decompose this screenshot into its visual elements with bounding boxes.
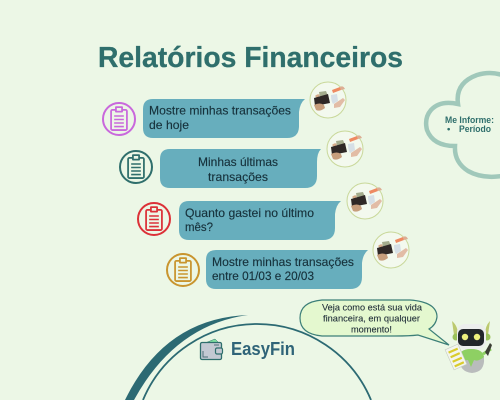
title: Relatórios Financeiros [98,42,403,74]
speech bubble 3: mês? [185,220,213,234]
icon: gold clipboard [167,254,199,286]
speech bubble 3 [179,201,341,240]
speech bubble 3: Quanto gastei no último [185,206,314,220]
icon: red clipboard [138,203,170,235]
robot speech bubble [300,300,449,345]
logo: EasyFin [200,339,295,360]
cloud callout: Período [459,124,491,135]
icon: wallet [200,339,222,360]
speech bubble 1 [143,99,305,138]
photo: wallet and hands [373,232,409,268]
speech bubble 2: Minhas últimas [198,155,278,169]
icon: teal clipboard [120,151,152,183]
robot speech bubble: momento! [351,324,392,336]
speech bubble 1: Mostre minhas transações [149,104,291,118]
decorative arcs [125,315,371,400]
cloud callout [426,73,500,177]
row 4: gold request [167,232,409,289]
speech bubble 2: transações [208,170,268,184]
photo: wallet and hands [327,131,363,167]
speech bubble 4: Mostre minhas transações [212,255,354,269]
row 2: teal request [120,131,363,188]
speech bubble 4 [206,250,368,289]
cloud callout: • [447,124,451,135]
icon: purple clipboard [103,103,135,135]
speech bubble 4: entre 01/03 e 20/03 [212,269,314,283]
photo: wallet and hands [347,183,383,219]
speech bubble 2 [160,149,321,188]
cloud callout: Me Informe: [445,115,494,126]
robot mascot [445,321,492,373]
photo: wallet and hands [310,82,346,118]
row 3: red request [138,183,383,240]
speech bubble 1: de hoje [149,118,189,132]
row 1: purple request [103,82,346,138]
logo: EasyFin: EasyFin [231,339,295,359]
robot speech bubble: Veja como está sua vida [322,302,423,314]
robot speech bubble: financeira, em qualquer [323,314,420,324]
